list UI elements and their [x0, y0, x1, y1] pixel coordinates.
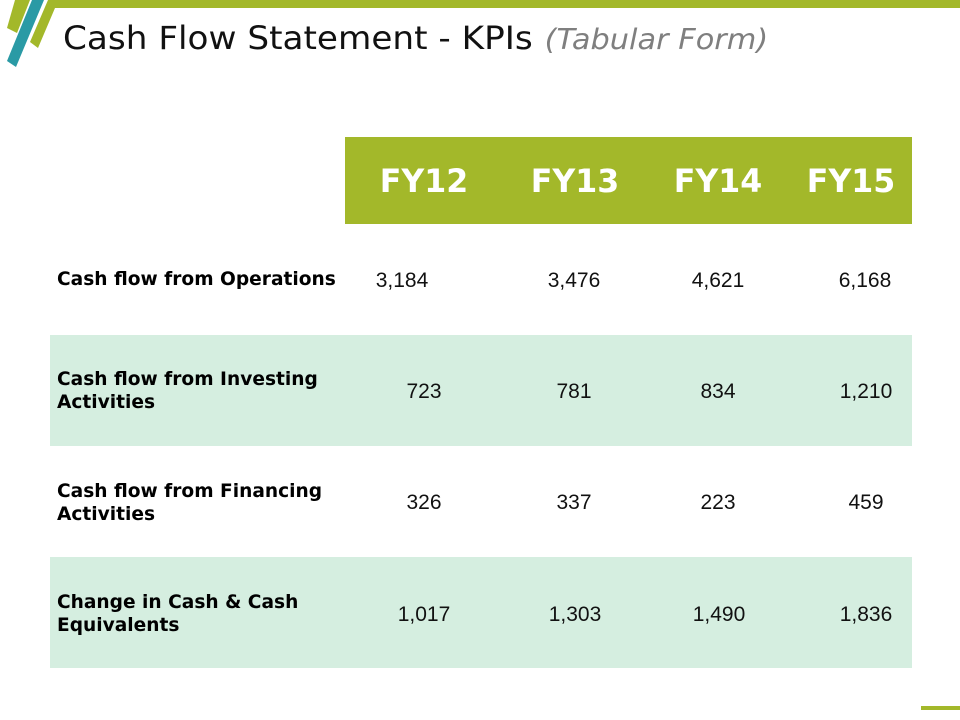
value: 1,836: [840, 603, 892, 626]
header: FY12: FY12: [380, 164, 468, 200]
value: 6,168: [839, 269, 891, 292]
row label: financing: Cash flow from Financing: [57, 481, 322, 502]
value: 1,210: [840, 380, 892, 403]
value: 834: [700, 380, 736, 403]
value: 1,490: [693, 603, 745, 626]
value: 326: [406, 491, 442, 514]
footer accent bar: [921, 706, 960, 710]
row background: change in cash: [50, 557, 912, 668]
value: 337: [556, 491, 592, 514]
row label: change in cash: [57, 592, 298, 636]
header: FY13: FY13: [531, 164, 619, 200]
row label: change in cash: Change in Cash & Cash: [57, 592, 298, 613]
value: 1,017: [398, 603, 450, 626]
value: 1,303: [549, 603, 601, 626]
value: 781: [556, 380, 592, 403]
header: FY14: FY14: [674, 164, 762, 200]
header: FY15: FY15: [807, 164, 895, 200]
value: 4,621: [692, 269, 744, 292]
value: 723: [406, 380, 442, 403]
value: 3,184: [376, 269, 428, 292]
value: 459: [848, 491, 884, 514]
value: 223: [700, 491, 736, 514]
title: Cash Flow Statement - KPIs (Tabular Form): [63, 19, 768, 57]
value: 3,476: [548, 269, 600, 292]
row label: financing: Activities: [57, 504, 155, 525]
row label: operations: Cash flow from Operations: [57, 269, 336, 290]
table header band: [345, 137, 912, 224]
row label: investing: Activities: [57, 392, 155, 413]
row label: investing: Cash flow from Investing: [57, 369, 318, 390]
row label: financing: [57, 481, 322, 525]
icon: slanted header logo stripes: [7, 0, 960, 67]
row background: investing: [50, 335, 912, 446]
row label: investing: [57, 369, 318, 413]
row label: change in cash: Equivalents: [57, 615, 179, 636]
